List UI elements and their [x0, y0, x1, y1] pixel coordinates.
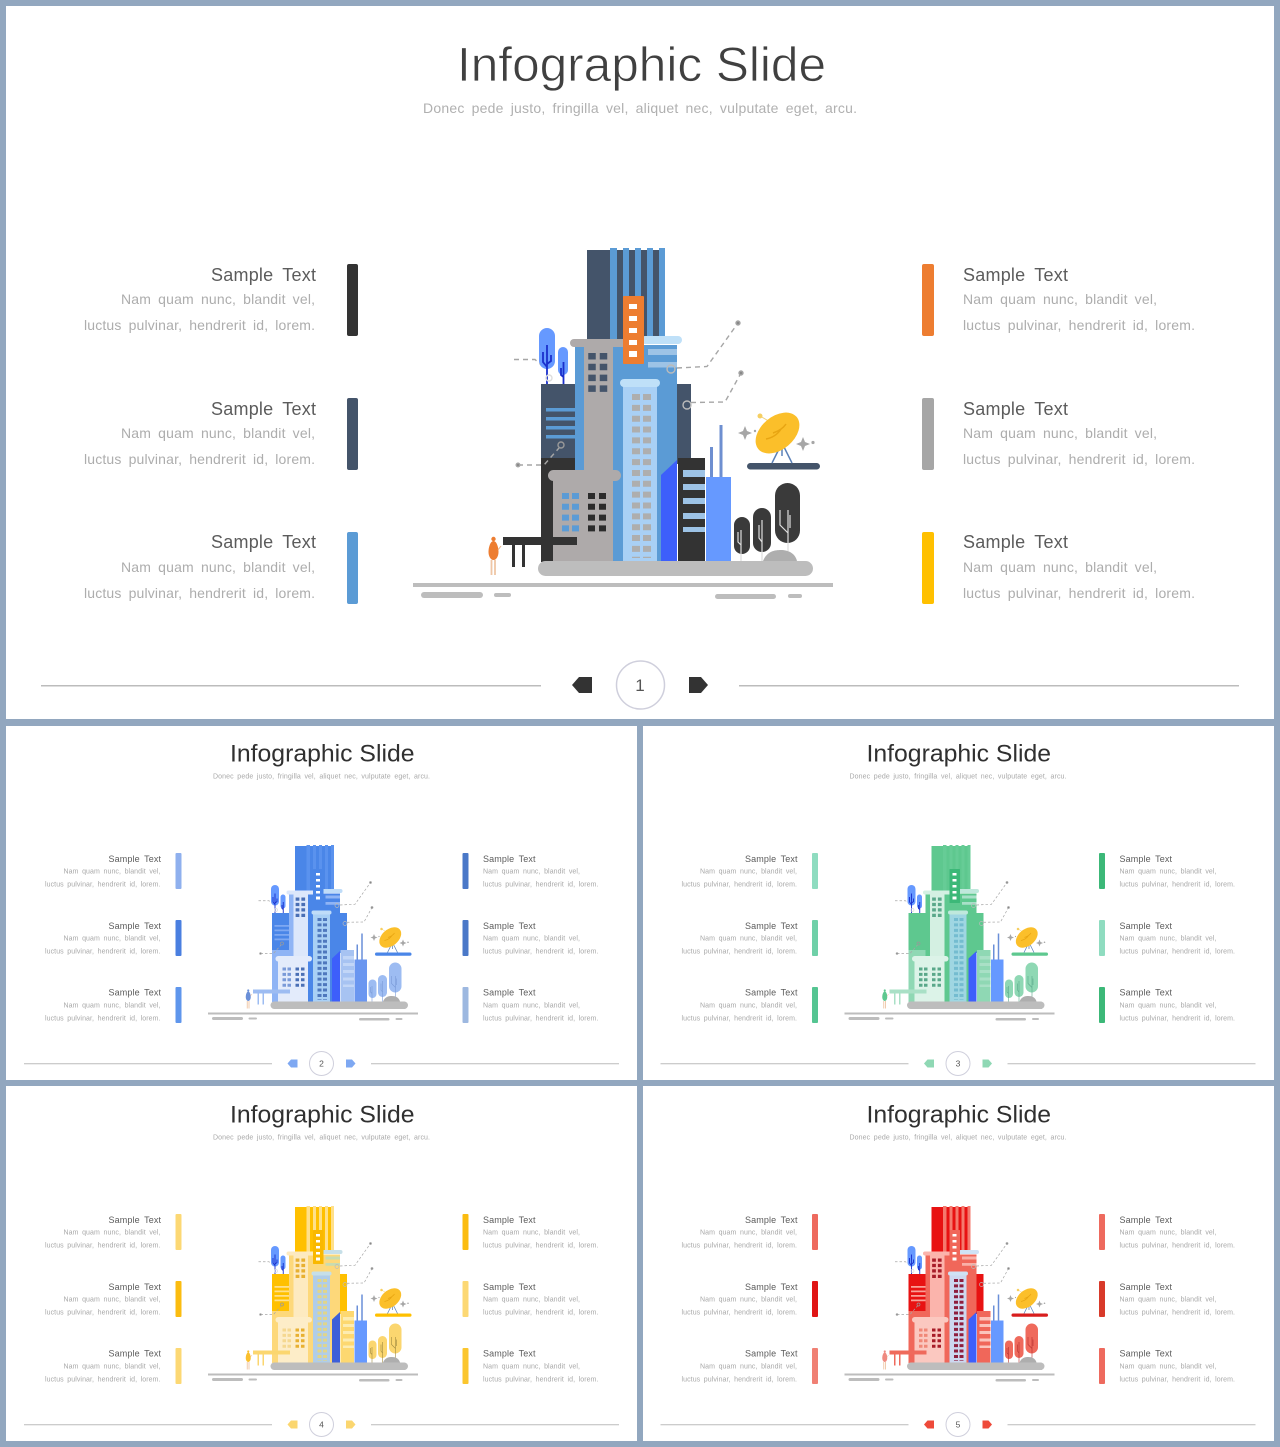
- black building: [678, 458, 705, 561]
- right text blocks: Sample Text: [1120, 1282, 1172, 1292]
- left text blocks: [682, 1215, 798, 1384]
- grey tower: [570, 339, 627, 480]
- right text blocks: [483, 1215, 599, 1384]
- left text blocks: luctus pulvinar, hendrerit id, lorem.: [45, 1242, 161, 1250]
- left text blocks: [45, 854, 161, 1022]
- illustration: city yellow: [208, 1206, 418, 1382]
- right text blocks: luctus pulvinar, hendrerit id, lorem.: [483, 948, 599, 956]
- main slide 1 content: [41, 39, 1239, 709]
- blue trees: [539, 328, 568, 384]
- right text blocks: Sample Text: [1120, 1348, 1172, 1358]
- right text blocks: luctus pulvinar, hendrerit id, lorem.: [1120, 1016, 1235, 1022]
- panel: slide 5 red: [643, 1086, 1274, 1441]
- slide 4 content: [24, 1102, 619, 1436]
- left text blocks: luctus pulvinar, hendrerit id, lorem.: [45, 1016, 161, 1022]
- text block: left 1: luctus pulvinar, hendrerit id, lorem.: [84, 317, 315, 333]
- pagination: 3: [956, 1058, 961, 1068]
- right text blocks: Sample Text: [1120, 988, 1172, 998]
- pagination: [41, 661, 1239, 709]
- text block: left 2: Sample Text: [211, 399, 316, 419]
- right text blocks: Nam quam nunc, blandit vel,: [1120, 868, 1217, 876]
- right text blocks: Nam quam nunc, blandit vel,: [483, 1364, 580, 1370]
- left text blocks: Nam quam nunc, blandit vel,: [64, 1296, 161, 1304]
- slide 3 content: [660, 740, 1256, 1076]
- pagination: [660, 1412, 1256, 1436]
- left text blocks: Nam quam nunc, blandit vel,: [700, 1364, 797, 1370]
- blue building with antennas: [706, 425, 731, 561]
- dark trees: [734, 483, 800, 561]
- panel: slide 2 blue: [6, 726, 637, 1080]
- callout lines: [514, 321, 743, 467]
- left text blocks: Nam quam nunc, blandit vel,: [700, 1296, 797, 1304]
- right dark tower: [670, 384, 691, 464]
- left text blocks: luctus pulvinar, hendrerit id, lorem.: [45, 882, 161, 888]
- left text blocks: luctus pulvinar, hendrerit id, lorem.: [45, 1376, 161, 1384]
- left text blocks: [682, 854, 798, 1022]
- subtitle: Donec pede justo, fringilla vel, aliquet nec, vulputate eget, arcu.: [213, 1134, 430, 1142]
- left text blocks: Sample Text: [108, 1282, 161, 1292]
- right text blocks: Sample Text: [483, 854, 536, 864]
- text block: left 1: [84, 265, 316, 333]
- illustration: city blue: [208, 845, 418, 1020]
- right text blocks: luctus pulvinar, hendrerit id, lorem.: [1120, 1310, 1235, 1316]
- panel: slide 3 green: [643, 726, 1274, 1080]
- left text blocks: luctus pulvinar, hendrerit id, lorem.: [45, 948, 161, 956]
- subtitle: Donec pede justo, fringilla vel, aliquet nec, vulputate eget, arcu.: [850, 1134, 1067, 1142]
- right text blocks: Nam quam nunc, blandit vel,: [483, 1296, 580, 1304]
- right text blocks: Sample Text: [483, 988, 536, 998]
- grey lower building: [548, 470, 621, 561]
- right text blocks: Sample Text: [483, 1282, 536, 1292]
- right text blocks: luctus pulvinar, hendrerit id, lorem.: [483, 1310, 599, 1316]
- text block: left 2: luctus pulvinar, hendrerit id, lorem.: [84, 451, 315, 467]
- right text blocks: Nam quam nunc, blandit vel,: [483, 936, 580, 942]
- right text blocks: luctus pulvinar, hendrerit id, lorem.: [483, 1016, 599, 1022]
- right text blocks: Sample Text: [1120, 921, 1172, 931]
- right text blocks: luctus pulvinar, hendrerit id, lorem.: [1120, 948, 1235, 956]
- left text blocks: luctus pulvinar, hendrerit id, lorem.: [682, 948, 797, 956]
- right text blocks: Nam quam nunc, blandit vel,: [1120, 936, 1217, 942]
- illustration: city: [413, 248, 833, 599]
- right text blocks: luctus pulvinar, hendrerit id, lorem.: [1120, 882, 1235, 888]
- left text blocks: Sample Text: [108, 1348, 161, 1358]
- text block: right 3: Nam quam nunc, blandit vel,: [963, 559, 1157, 575]
- right text blocks: Nam quam nunc, blandit vel,: [483, 1230, 580, 1236]
- ground base: [413, 561, 833, 599]
- text block: right 1: Sample Text: [963, 265, 1068, 285]
- text block: right 2: Nam quam nunc, blandit vel,: [963, 425, 1157, 441]
- left text blocks: luctus pulvinar, hendrerit id, lorem.: [682, 1242, 797, 1250]
- right text blocks: luctus pulvinar, hendrerit id, lorem.: [483, 882, 599, 888]
- pagination: [24, 1052, 619, 1076]
- text block: right 1: Nam quam nunc, blandit vel,: [963, 291, 1157, 307]
- text block: right 3: luctus pulvinar, hendrerit id, lorem.: [963, 585, 1195, 601]
- panel: main slide 1: [6, 6, 1274, 719]
- subtitle: Donec pede justo, fringilla vel, aliquet nec, vulputate eget, arcu.: [850, 774, 1067, 780]
- text block: left 1: Sample Text: [211, 265, 316, 285]
- slide 5 content: [660, 1102, 1256, 1436]
- right text blocks: [483, 854, 599, 1022]
- left text blocks: Sample Text: [108, 921, 161, 931]
- right text blocks: Sample Text: [483, 1348, 536, 1358]
- left dark tower: [541, 384, 577, 562]
- left text blocks: Sample Text: [108, 988, 161, 998]
- text block: left 2: [84, 399, 316, 467]
- colour bars: [176, 853, 468, 1023]
- left text blocks: Nam quam nunc, blandit vel,: [64, 1364, 161, 1370]
- text block: left 3: [84, 532, 316, 601]
- text block: left 2: Nam quam nunc, blandit vel,: [121, 425, 315, 441]
- left text blocks: luctus pulvinar, hendrerit id, lorem.: [682, 1310, 797, 1316]
- pagination: 1: [635, 676, 645, 695]
- right text blocks: [1120, 854, 1235, 1022]
- pagination: [660, 1052, 1256, 1076]
- right text blocks: luctus pulvinar, hendrerit id, lorem.: [1120, 1242, 1235, 1250]
- title: Infographic Slide: [866, 740, 1051, 768]
- left text blocks: Nam quam nunc, blandit vel,: [700, 1002, 797, 1010]
- right text blocks: Nam quam nunc, blandit vel,: [483, 868, 580, 876]
- colour bars: [176, 1214, 468, 1384]
- text block: left 1: Nam quam nunc, blandit vel,: [121, 291, 315, 307]
- left text blocks: Sample Text: [108, 1215, 161, 1225]
- title: Infographic Slide: [457, 39, 826, 92]
- left text blocks: Nam quam nunc, blandit vel,: [64, 868, 161, 876]
- slide 2 content: [24, 740, 619, 1076]
- right text blocks: Sample Text: [483, 921, 536, 931]
- left text blocks: Sample Text: [745, 921, 798, 931]
- title: Infographic Slide: [230, 740, 414, 768]
- right text blocks: Sample Text: [483, 1215, 536, 1225]
- left text blocks: Sample Text: [745, 1282, 798, 1292]
- right text blocks: Nam quam nunc, blandit vel,: [483, 1002, 580, 1010]
- pagination: 4: [319, 1420, 324, 1430]
- left text blocks: Nam quam nunc, blandit vel,: [64, 936, 161, 942]
- left text blocks: luctus pulvinar, hendrerit id, lorem.: [682, 1376, 797, 1384]
- text block: right 3: Sample Text: [963, 532, 1068, 552]
- light tower: [620, 379, 660, 561]
- satellite dish: [738, 404, 820, 470]
- panel: slide 4 yellow: [6, 1086, 637, 1441]
- right text blocks: Nam quam nunc, blandit vel,: [1120, 1296, 1217, 1304]
- left text blocks: Nam quam nunc, blandit vel,: [700, 868, 797, 876]
- left text blocks: Sample Text: [745, 854, 798, 864]
- right text blocks: luctus pulvinar, hendrerit id, lorem.: [483, 1376, 599, 1384]
- right text blocks: Nam quam nunc, blandit vel,: [1120, 1230, 1217, 1236]
- left text blocks: luctus pulvinar, hendrerit id, lorem.: [682, 882, 797, 888]
- right text blocks: Sample Text: [1120, 1215, 1172, 1225]
- text block: right 1: luctus pulvinar, hendrerit id, lorem.: [963, 317, 1195, 333]
- main blue tower: [613, 336, 682, 561]
- colour bars: [812, 853, 1105, 1023]
- left text blocks: Nam quam nunc, blandit vel,: [64, 1002, 161, 1010]
- top tower: [587, 248, 665, 342]
- title: Infographic Slide: [866, 1102, 1051, 1128]
- colour bars: [812, 1214, 1105, 1384]
- text block: left 3: luctus pulvinar, hendrerit id, lorem.: [84, 585, 315, 601]
- left text blocks: luctus pulvinar, hendrerit id, lorem.: [682, 1016, 797, 1022]
- illustration: city green: [844, 845, 1054, 1020]
- colour bars: [347, 264, 934, 604]
- left text blocks: Nam quam nunc, blandit vel,: [700, 1230, 797, 1236]
- right text blocks: Nam quam nunc, blandit vel,: [1120, 1002, 1217, 1010]
- text block: right 1: [963, 265, 1195, 333]
- subtitle: Donec pede justo, fringilla vel, aliquet nec, vulputate eget, arcu.: [423, 100, 857, 116]
- text block: right 2: [963, 399, 1195, 467]
- left text blocks: Sample Text: [108, 854, 161, 864]
- text block: left 3: Sample Text: [211, 532, 316, 552]
- pagination: [24, 1412, 619, 1436]
- pagination: 5: [956, 1420, 961, 1430]
- right text blocks: luctus pulvinar, hendrerit id, lorem.: [483, 1242, 599, 1250]
- right text blocks: Sample Text: [1120, 854, 1172, 864]
- orange panel: [623, 296, 644, 364]
- left text blocks: [45, 1215, 161, 1384]
- right text blocks: [1120, 1215, 1235, 1384]
- text block: right 3: [963, 532, 1195, 601]
- right text blocks: luctus pulvinar, hendrerit id, lorem.: [1120, 1376, 1235, 1384]
- left text blocks: luctus pulvinar, hendrerit id, lorem.: [45, 1310, 161, 1316]
- bench: [503, 537, 577, 567]
- text block: right 2: Sample Text: [963, 399, 1068, 419]
- subtitle: Donec pede justo, fringilla vel, aliquet nec, vulputate eget, arcu.: [213, 774, 430, 780]
- title: Infographic Slide: [230, 1102, 414, 1128]
- right text blocks: Nam quam nunc, blandit vel,: [1120, 1364, 1217, 1370]
- illustration: city red: [844, 1206, 1054, 1382]
- person: [488, 537, 501, 575]
- left text blocks: Sample Text: [745, 988, 798, 998]
- text block: right 2: luctus pulvinar, hendrerit id, lorem.: [963, 451, 1195, 467]
- pagination: 2: [319, 1058, 324, 1068]
- left text blocks: Nam quam nunc, blandit vel,: [700, 936, 797, 942]
- blue wedge: [661, 460, 677, 561]
- left text blocks: Sample Text: [745, 1215, 798, 1225]
- left text blocks: Nam quam nunc, blandit vel,: [64, 1230, 161, 1236]
- text block: left 3: Nam quam nunc, blandit vel,: [121, 559, 315, 575]
- left text blocks: Sample Text: [745, 1348, 798, 1358]
